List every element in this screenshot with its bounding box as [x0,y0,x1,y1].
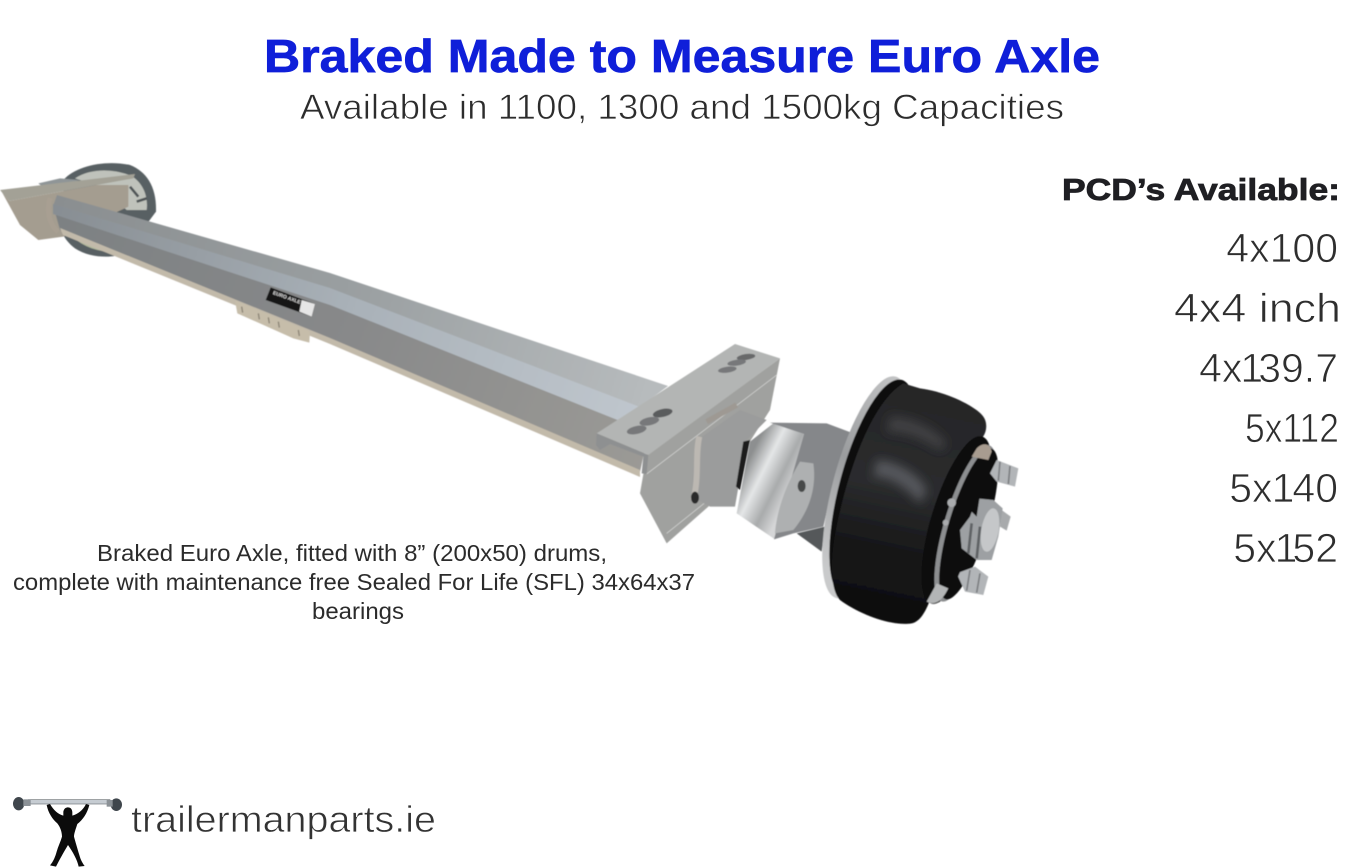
brake drum and hub [804,368,1018,624]
title: Braked Made to Measure Euro Axle [264,30,1100,82]
axle tube [48,195,668,477]
drum body [832,383,986,624]
knuckle [770,423,853,552]
website url: trailermanparts.ie [131,799,436,840]
drum highlights [873,417,947,503]
mounting plate under tube [235,301,310,343]
axle label [266,287,315,317]
caption [13,540,695,624]
pcd 5x152: 5x152 [1233,525,1338,571]
pcd 5x112: 5x112 [1245,405,1339,451]
pcd 4x139.7: 4x139.7 [1199,345,1338,391]
caption: bearings [312,598,404,624]
PCD heading: PCD’s Available: [1062,172,1340,207]
near hub assembly [596,344,853,552]
logo bar [28,800,110,804]
caption: complete with maintenance free Sealed For Life (SFL) 34x64x37 [13,569,695,595]
caption: Braked Euro Axle, fitted with 8” (200x50) drums, [97,540,607,566]
pcd 4x4 inch: 4x4 inch [1174,285,1341,331]
axle label: EURO AXLE [272,290,302,306]
logo figure [47,804,89,867]
flange ring [804,368,928,607]
drum face [907,429,1010,611]
logo: strongman lifting axle [13,797,122,867]
PCD list [1174,225,1341,571]
collar [737,423,804,539]
far bracket [0,174,135,240]
photo: braked euro axle [0,163,1018,624]
logo wheels [13,797,122,811]
pcd 4x100: 4x100 [1226,225,1338,271]
spindle stub and weld [691,405,767,507]
pcd 5x140: 5x140 [1229,465,1338,511]
subtitle: Available in 1100, 1300 and 1500kg Capacities [300,88,1064,127]
near bracket [596,344,780,543]
wheel studs and hub nut [943,458,1018,595]
far wheel drum [63,163,156,257]
